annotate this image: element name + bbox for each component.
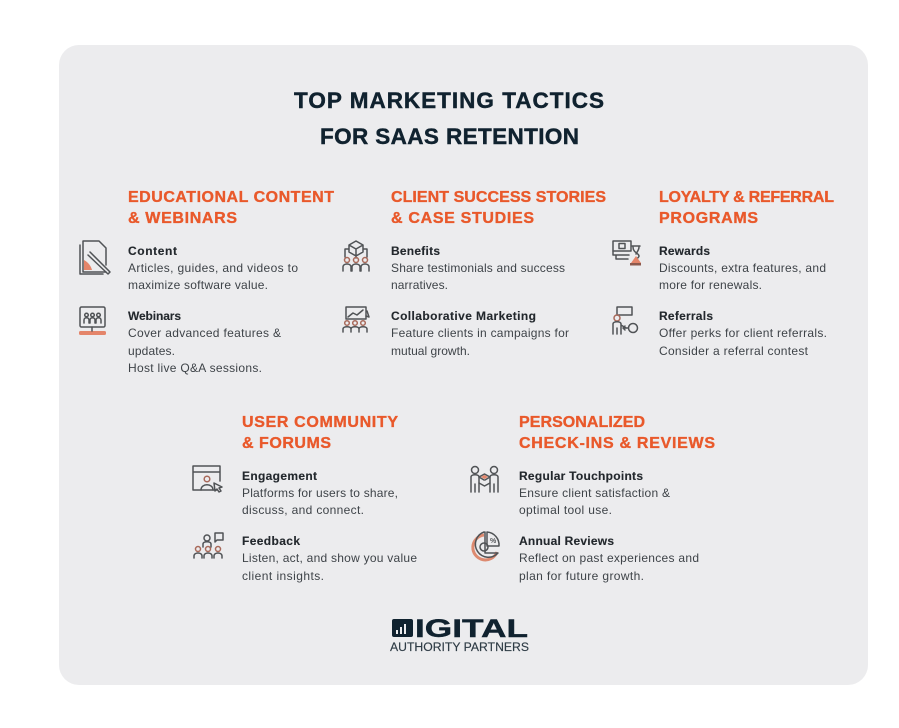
text: referrals: Consider a referral contest	[659, 344, 809, 358]
icon: presentation and three people	[343, 307, 369, 332]
text: regular touchpoints: optimal tool use.	[519, 503, 612, 517]
panel: loyalty and referral programs	[613, 189, 834, 358]
heading: personalized: CHECK-INS & REVIEWS	[519, 435, 715, 452]
heading: loyalty	[659, 189, 834, 227]
text: content: Content	[128, 244, 177, 258]
text: annual reviews: plan for future growth.	[519, 569, 644, 583]
heading: personalized	[519, 414, 715, 452]
panel: educational content and webinars	[79, 189, 334, 375]
title: FOR SAAS RETENTION	[320, 124, 579, 149]
icon: box and three people	[343, 241, 369, 271]
text: rewards: Rewards	[659, 244, 710, 258]
text: benefits: Share testimonials and success	[391, 261, 565, 275]
logo: Digital Authority Partners: AUTHORITY PARTNERS	[390, 642, 529, 654]
title	[294, 88, 604, 149]
text: content	[128, 244, 298, 292]
heading: personalized: PERSONALIZED	[519, 414, 645, 431]
text: webinars: Cover advanced features &	[128, 326, 281, 340]
icon: percentage pie chart: %	[490, 538, 497, 545]
heading: user community: USER COMMUNITY	[242, 414, 398, 431]
heading: educational content: EDUCATIONAL CONTENT	[128, 189, 334, 206]
heading: educational content: & WEBINARS	[128, 210, 237, 227]
heading: user community	[242, 414, 398, 452]
panel: background card	[59, 45, 868, 685]
heading: client success: & CASE STUDIES	[391, 210, 534, 227]
panel: client success stories and case studies	[343, 189, 606, 358]
text: regular touchpoints	[519, 469, 670, 517]
text: content: maximize software value.	[128, 278, 268, 292]
text: annual reviews: Reflect on past experiences and	[519, 551, 699, 565]
text: rewards	[659, 244, 826, 292]
text: benefits	[391, 244, 565, 292]
panel: user community and forums	[193, 414, 417, 583]
text: webinars: Host live Q&A sessions.	[128, 361, 262, 375]
text: rewards: Discounts, extra features, and	[659, 261, 826, 275]
icon: person with coin	[613, 307, 638, 334]
text: referrals: Referrals	[659, 309, 713, 323]
text: annual reviews: Annual Reviews	[519, 534, 614, 548]
text: feedback: Feedback	[242, 534, 300, 548]
text: rewards: more for renewals.	[659, 278, 762, 292]
icon: group with speech bubble	[194, 533, 223, 558]
text: engagement: Engagement	[242, 469, 317, 483]
text: referrals	[659, 309, 827, 358]
text: webinars: updates.	[128, 344, 175, 358]
text: feedback: Listen, act, and show you value	[242, 551, 417, 565]
text: collaborative marketing: Collaborative Marketing	[391, 309, 536, 323]
icon: browser with user and cursor	[193, 466, 222, 492]
heading: educational content	[128, 189, 334, 227]
text: benefits: narratives.	[391, 278, 448, 292]
heading: client success	[391, 189, 606, 227]
text: regular touchpoints: Ensure client satisfaction &	[519, 486, 670, 500]
icon: webinar monitor	[79, 307, 106, 335]
text: referrals: Offer perks for client referrals.	[659, 326, 827, 340]
logo: Digital Authority Partners	[390, 615, 529, 654]
text: benefits: Benefits	[391, 244, 440, 258]
title: TOP MARKETING TACTICS	[294, 88, 604, 113]
icon: money and hourglass	[613, 241, 641, 266]
text: collaborative marketing: mutual growth.	[391, 344, 470, 358]
logo: Digital Authority Partners: IGITAL	[415, 615, 528, 643]
text: collaborative marketing	[391, 309, 569, 358]
text: collaborative marketing: Feature clients in campaigns for	[391, 326, 569, 340]
text: annual reviews	[519, 534, 699, 583]
text: engagement: discuss, and connect.	[242, 503, 364, 517]
text: content: Articles, guides, and videos to	[128, 261, 298, 275]
heading: loyalty: PROGRAMS	[659, 210, 758, 227]
icon: two people holding a box	[471, 466, 498, 492]
text: engagement: Platforms for users to share,	[242, 486, 398, 500]
panel: personalized check-ins and reviews	[471, 414, 715, 583]
text: webinars: Webinars	[128, 309, 181, 323]
text: regular touchpoints: Regular Touchpoints	[519, 469, 643, 483]
icon: document and pencil	[80, 241, 110, 274]
heading: user community: & FORUMS	[242, 435, 331, 452]
icon: percentage pie chart	[473, 532, 499, 560]
text: engagement	[242, 469, 398, 517]
text: webinars	[128, 309, 281, 375]
heading: loyalty: LOYALTY & REFERRAL	[659, 189, 834, 206]
heading: client success: CLIENT SUCCESS STORIES	[391, 189, 606, 206]
text: feedback	[242, 534, 417, 583]
text: feedback: client insights.	[242, 569, 324, 583]
